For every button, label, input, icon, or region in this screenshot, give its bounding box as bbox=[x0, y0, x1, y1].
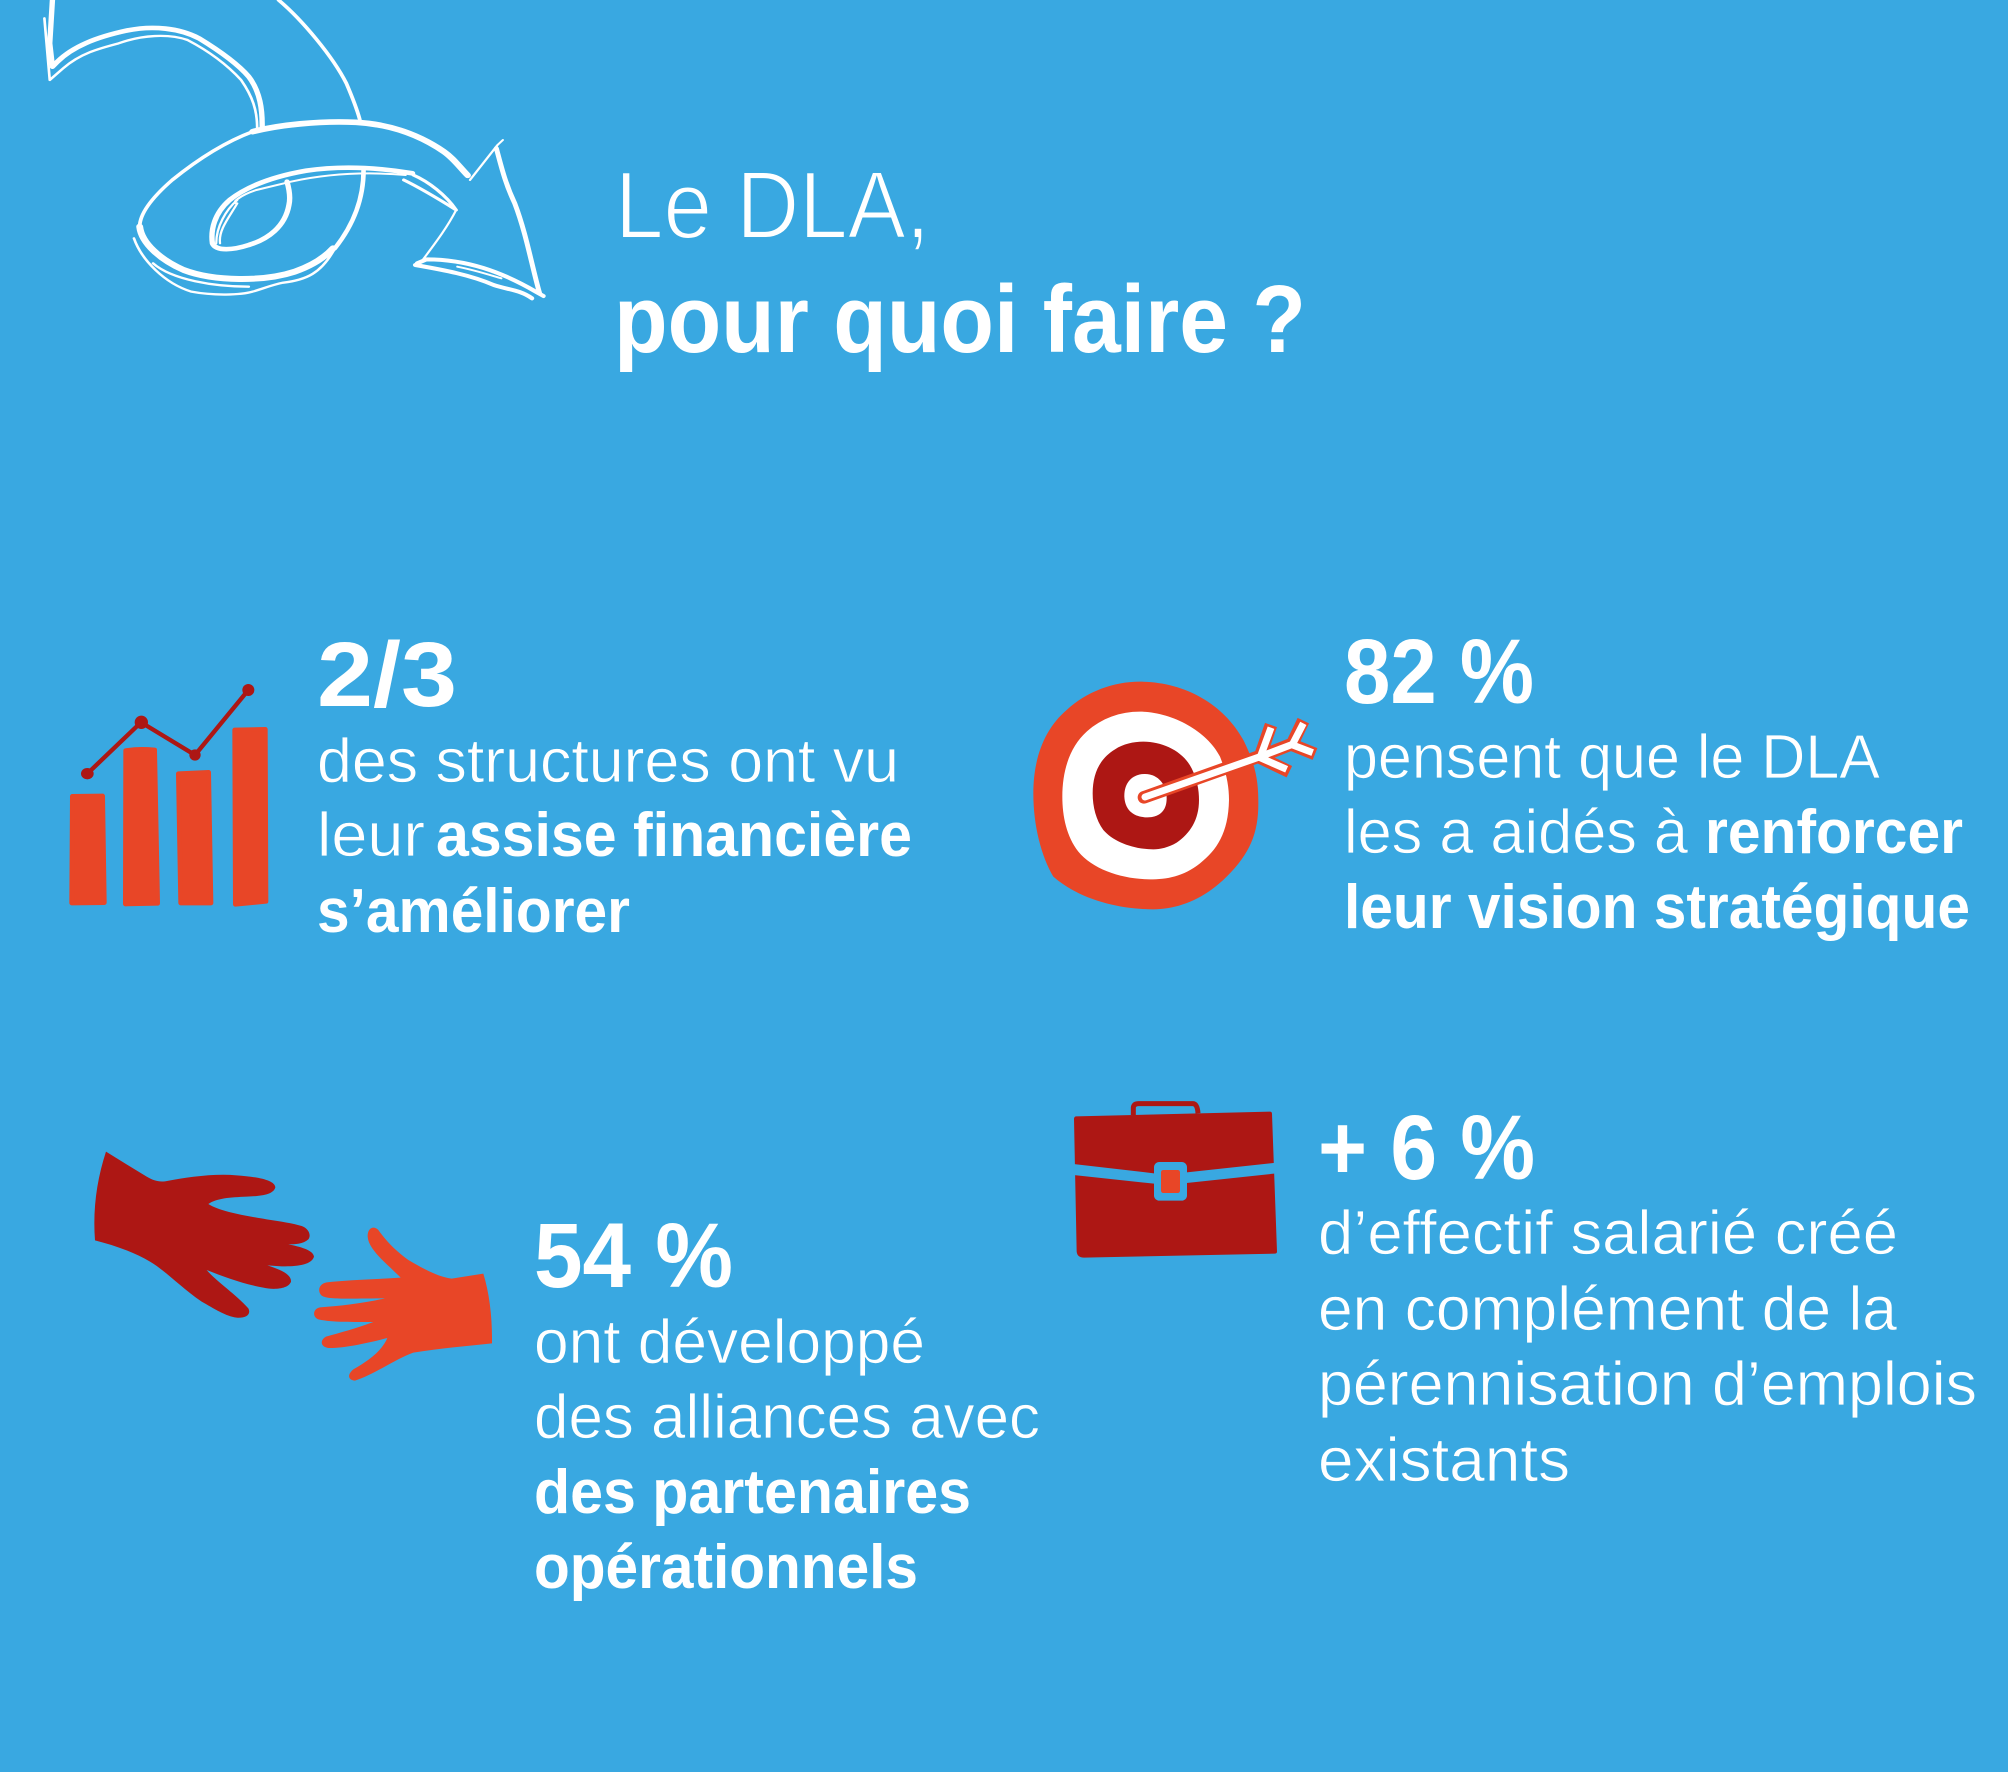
icon: hand-drawn looping arrow bbox=[44, 0, 543, 298]
stat: 82 %: 82 % bbox=[1344, 621, 1534, 723]
stat: 2/3: 2/3 bbox=[317, 624, 457, 726]
text block: vision stratégique bbox=[1344, 723, 1970, 942]
stat: + 6 %: + 6 % bbox=[1318, 1097, 1535, 1199]
text block: effectif salarié: en complément de la bbox=[1318, 1275, 1898, 1344]
text block: effectif salarié: existants bbox=[1318, 1426, 1570, 1495]
text block: assise financière: s’améliorer bbox=[317, 877, 630, 946]
icon: target with arrow bbox=[1033, 682, 1315, 909]
panel: assise financière bbox=[72, 624, 912, 946]
text block: assise financière: assise financière bbox=[436, 801, 912, 870]
text block: partenaires opérationnels: opérationnels bbox=[534, 1533, 918, 1602]
text block: assise financière: des structures ont vu bbox=[317, 727, 899, 796]
title bbox=[614, 152, 1306, 373]
text block: partenaires opérationnels: ont développé bbox=[534, 1308, 925, 1377]
text block: partenaires opérationnels bbox=[534, 1308, 1040, 1602]
text block: effectif salarié bbox=[1318, 1199, 1977, 1495]
panel: vision stratégique bbox=[1033, 621, 1970, 942]
text block: assise financière: leur bbox=[317, 801, 425, 870]
text block: effectif salarié: pérennisation d’emplois bbox=[1318, 1350, 1977, 1419]
icon: dark red hand bbox=[94, 1152, 314, 1318]
icon: bar chart with rising line bbox=[72, 684, 266, 904]
panel: partenaires opérationnels bbox=[94, 1152, 1040, 1602]
text block: vision stratégique: renforcer bbox=[1705, 798, 1963, 867]
icon: briefcase bbox=[1073, 1104, 1277, 1258]
text block: assise financière bbox=[317, 727, 912, 946]
panel: effectif salarié bbox=[1073, 1097, 1977, 1495]
text block: vision stratégique: pensent que le DLA bbox=[1344, 723, 1881, 792]
text block: partenaires opérationnels: des alliances avec bbox=[534, 1383, 1040, 1452]
text block: partenaires opérationnels: des partenaires bbox=[534, 1458, 971, 1527]
title: Le DLA, bbox=[615, 152, 930, 259]
text block: vision stratégique: les a aidés à bbox=[1344, 798, 1689, 867]
text block: vision stratégique: leur vision stratégique bbox=[1344, 873, 1970, 942]
stat: 54 %: 54 % bbox=[534, 1205, 733, 1307]
title: pour quoi faire ? bbox=[614, 266, 1306, 373]
icon: orange hand bbox=[314, 1228, 492, 1381]
icon: two hands reaching bbox=[94, 1152, 492, 1381]
text block: effectif salarié: d’effectif salarié créé bbox=[1318, 1199, 1898, 1268]
